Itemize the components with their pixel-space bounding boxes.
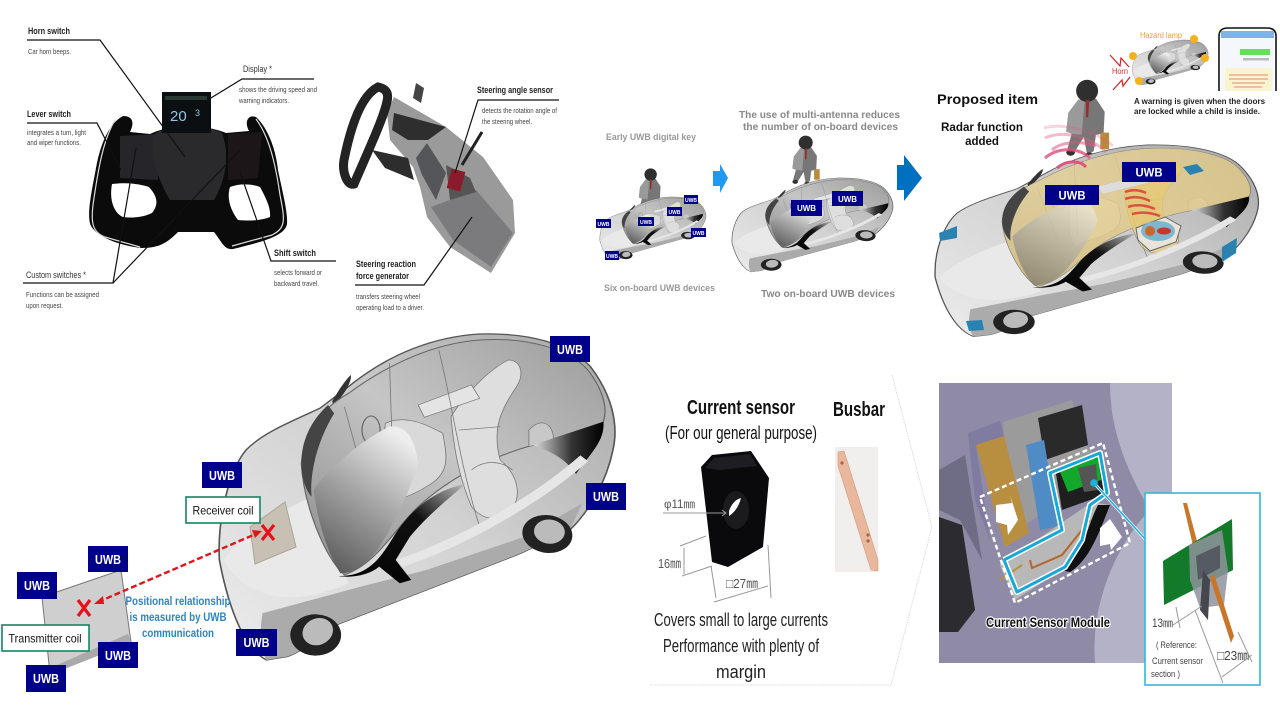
two UWB tags	[791, 191, 863, 216]
panel: current sensor and busbar	[650, 375, 932, 685]
busbar part	[835, 447, 878, 572]
heading: Proposed item	[937, 91, 1038, 107]
label: steering angle sensor: the steering wheel.	[482, 117, 532, 126]
busbar heading: Busbar	[833, 399, 885, 421]
car	[1132, 40, 1208, 85]
blue sensor marks	[939, 164, 1237, 331]
heading: the number of on-board devices	[743, 121, 898, 133]
display	[162, 92, 211, 133]
child seat	[1136, 217, 1181, 251]
person	[1066, 80, 1109, 159]
inset dimensions and note	[1151, 616, 1249, 680]
UWB tags: UWB	[24, 578, 50, 593]
car	[600, 197, 706, 260]
inset dimensions and note: Current sensor	[1152, 656, 1203, 667]
label: horn switch	[28, 26, 71, 56]
inset dimensions and note: ( Reference:	[1156, 640, 1197, 651]
dashed highlight outline	[980, 443, 1130, 603]
label: shift switch	[274, 248, 322, 288]
heading: The use of multi-antenna reduces	[739, 109, 900, 121]
label: steering reaction force generator: Steering reaction	[356, 259, 416, 269]
dimensions: □27㎜	[726, 576, 758, 591]
UWB tags: UWB	[33, 671, 59, 686]
label: lever switch: integrates a turn, light	[27, 128, 87, 137]
radar waves above car	[1044, 126, 1113, 168]
receiver coil plate	[250, 502, 296, 564]
inset dimensions and note: 13㎜	[1152, 616, 1173, 630]
label: steering angle sensor: Steering angle sensor	[477, 85, 553, 95]
positional relationship note: is measured by UWB	[130, 610, 227, 624]
label: lever switch: and wiper functions.	[27, 138, 81, 147]
label: horn switch: Car horn beeps.	[28, 47, 71, 56]
panel: wireless charging with UWB positioning	[2, 334, 626, 692]
UWB tags: UWB	[105, 648, 131, 663]
UWB tags: UWB	[244, 635, 270, 650]
label: steering angle sensor	[477, 85, 558, 126]
label: steering reaction force generator: transfers steering wheel	[356, 292, 420, 301]
transmitter coil label: Transmitter coil	[8, 632, 82, 646]
label: lever switch	[27, 109, 87, 147]
phone	[1219, 28, 1276, 91]
label: custom switches: upon request.	[26, 301, 63, 310]
label: shift switch: selects forward or	[274, 268, 322, 277]
label: lever switch: Lever switch	[27, 109, 71, 119]
label: display: shows the driving speed and	[239, 85, 317, 94]
label: shift switch: backward travel.	[274, 279, 319, 288]
horn sound marks	[1110, 55, 1130, 90]
person	[792, 136, 820, 186]
positional relationship note	[126, 594, 230, 640]
label: steering reaction force generator: force generator	[356, 271, 409, 281]
UWB tags: UWB	[95, 552, 121, 567]
hazard label: Hazard lamp	[1140, 31, 1183, 40]
current sensor heading: (For our general purpose)	[665, 423, 817, 443]
caption: Two on-board UWB devices	[761, 289, 895, 300]
dimension lines	[663, 510, 771, 602]
callout connector	[1091, 480, 1146, 540]
UWB tags: UWB	[593, 489, 619, 504]
inset dimensions and note: section )	[1151, 669, 1180, 680]
description: Covers small to large currents	[654, 609, 828, 630]
display: 20	[170, 108, 187, 125]
receiver coil label: Receiver coil	[192, 504, 254, 518]
positional measurement arrow	[94, 530, 262, 604]
UWB tags	[1045, 162, 1176, 205]
horn label: Horn	[1112, 67, 1128, 76]
installation render	[939, 383, 1172, 663]
label: shift switch: Shift switch	[274, 248, 316, 258]
current sensor part	[701, 451, 769, 567]
hazard lamps	[1129, 35, 1209, 85]
panel: steering column module	[344, 83, 559, 312]
panel: early UWB digital key	[596, 132, 715, 293]
display: 3	[195, 108, 200, 118]
steering column illustration	[344, 83, 515, 273]
panel: current sensor module installation	[939, 383, 1260, 685]
label: steering angle sensor: detects the rotation angle of	[482, 106, 558, 115]
panel: multi-antenna	[732, 109, 900, 300]
label: steering reaction force generator	[356, 259, 424, 312]
panel: hazard and horn alert	[1110, 28, 1276, 91]
panel: proposed item	[935, 80, 1265, 338]
positional relationship note: communication	[142, 626, 214, 640]
label: steering reaction force generator: operating load to a driver.	[356, 303, 424, 312]
label: custom switches	[26, 270, 99, 310]
white pointer arrows	[996, 495, 1122, 550]
label: display	[238, 64, 317, 105]
receiver coil label	[186, 497, 260, 523]
caption: Six on-board UWB devices	[604, 283, 715, 293]
dimensions	[658, 497, 758, 591]
UWB tags: UWB	[1058, 190, 1086, 202]
label: custom switches: Functions can be assigned	[26, 290, 99, 299]
warning note: A warning is given when the doors	[1134, 97, 1265, 106]
car	[732, 178, 893, 273]
six UWB tags	[596, 195, 706, 260]
radar label: Radar function	[941, 122, 1023, 134]
heading	[739, 109, 900, 133]
UWB tags: UWB	[557, 342, 583, 357]
arrow	[713, 164, 728, 193]
warning note	[1134, 97, 1265, 116]
radar label: added	[965, 136, 999, 148]
description: margin	[716, 661, 766, 682]
module label: Current Sensor Module	[986, 614, 1110, 630]
positional relationship note: Positional relationship	[126, 594, 230, 608]
cyan module outline	[1004, 453, 1107, 592]
car with highlighted cabin	[935, 145, 1258, 338]
label: display: warning indicators.	[238, 96, 289, 105]
inset dimensions and note: □23㎜	[1217, 648, 1249, 663]
lead lines	[23, 40, 336, 283]
dimensions: φ11㎜	[664, 497, 695, 511]
radar label	[941, 122, 1023, 148]
lead lines	[355, 100, 559, 285]
steering yoke illustration	[89, 92, 287, 249]
panel: steering yoke controls	[23, 26, 336, 310]
UWB tags	[17, 336, 626, 692]
transmitter coil label	[2, 625, 89, 651]
current sensor heading: Current sensor	[687, 397, 795, 419]
label: horn switch: Horn switch	[28, 26, 70, 36]
two UWB tags: UWB	[797, 204, 816, 213]
arrow	[897, 155, 922, 201]
UWB tags: UWB	[209, 468, 235, 483]
label: display: Display *	[243, 64, 272, 74]
description	[654, 609, 828, 682]
dimensions: 16㎜	[658, 556, 681, 571]
six UWB tags: UWB	[669, 210, 681, 216]
current sensor heading	[665, 397, 817, 443]
six UWB tags: UWB	[685, 198, 697, 204]
six UWB tags: UWB	[693, 231, 705, 237]
six UWB tags: UWB	[640, 220, 652, 226]
UWB tags: UWB	[1136, 168, 1162, 180]
heading: Early UWB digital key	[606, 132, 696, 142]
two UWB tags: UWB	[838, 195, 857, 204]
transmitter coil plate	[42, 570, 131, 674]
car	[219, 334, 615, 662]
warning note: are locked while a child is inside.	[1134, 107, 1260, 116]
label: custom switches: Custom switches *	[26, 270, 86, 280]
inset dimension lines	[1173, 606, 1252, 683]
red X marks	[78, 525, 274, 616]
person	[639, 168, 663, 213]
radar waves inside cabin	[1125, 190, 1160, 216]
six UWB tags: UWB	[598, 222, 610, 228]
description: Performance with plenty of	[663, 635, 820, 656]
inset: sensor section	[1145, 493, 1260, 685]
six UWB tags: UWB	[606, 254, 618, 260]
